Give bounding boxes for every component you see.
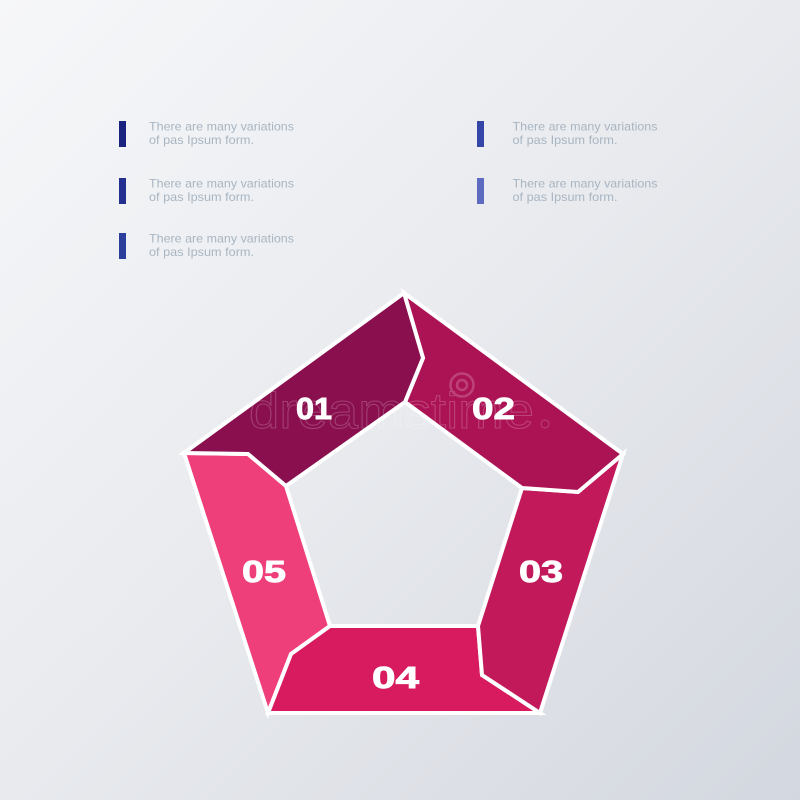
segment 03: 03 [519,554,563,589]
legend item 1: There are many variations [149,120,294,134]
legend item 1 [119,120,294,147]
segment 02 [404,293,623,492]
legend item 4: of pas Ipsum form. [512,133,618,147]
legend [119,120,658,259]
pentagon chart [184,293,623,713]
legend item 2: There are many variations [149,176,294,190]
legend item 5 [477,176,658,204]
segment 01: 01 [296,391,332,426]
legend item 2 [119,176,294,204]
legend item 4 [477,120,658,147]
legend item 5: of pas Ipsum form. [512,190,618,204]
segment 05 [184,453,330,713]
segment 04 [268,626,540,713]
segment 05: 05 [242,554,286,589]
legend item 5: There are many variations [512,176,658,190]
legend item 2: of pas Ipsum form. [149,190,254,204]
segment 04: 04 [372,660,420,695]
legend item 3: of pas Ipsum form. [149,245,254,259]
segment 02: 02 [472,391,515,426]
watermark: dreamstime [249,383,534,439]
legend item 1: of pas Ipsum form. [149,133,254,147]
legend item 3: There are many variations [149,232,294,246]
segment 01 [184,293,423,486]
segment 03 [478,454,623,713]
legend item 4: There are many variations [512,120,658,134]
legend item 3 [119,232,294,259]
